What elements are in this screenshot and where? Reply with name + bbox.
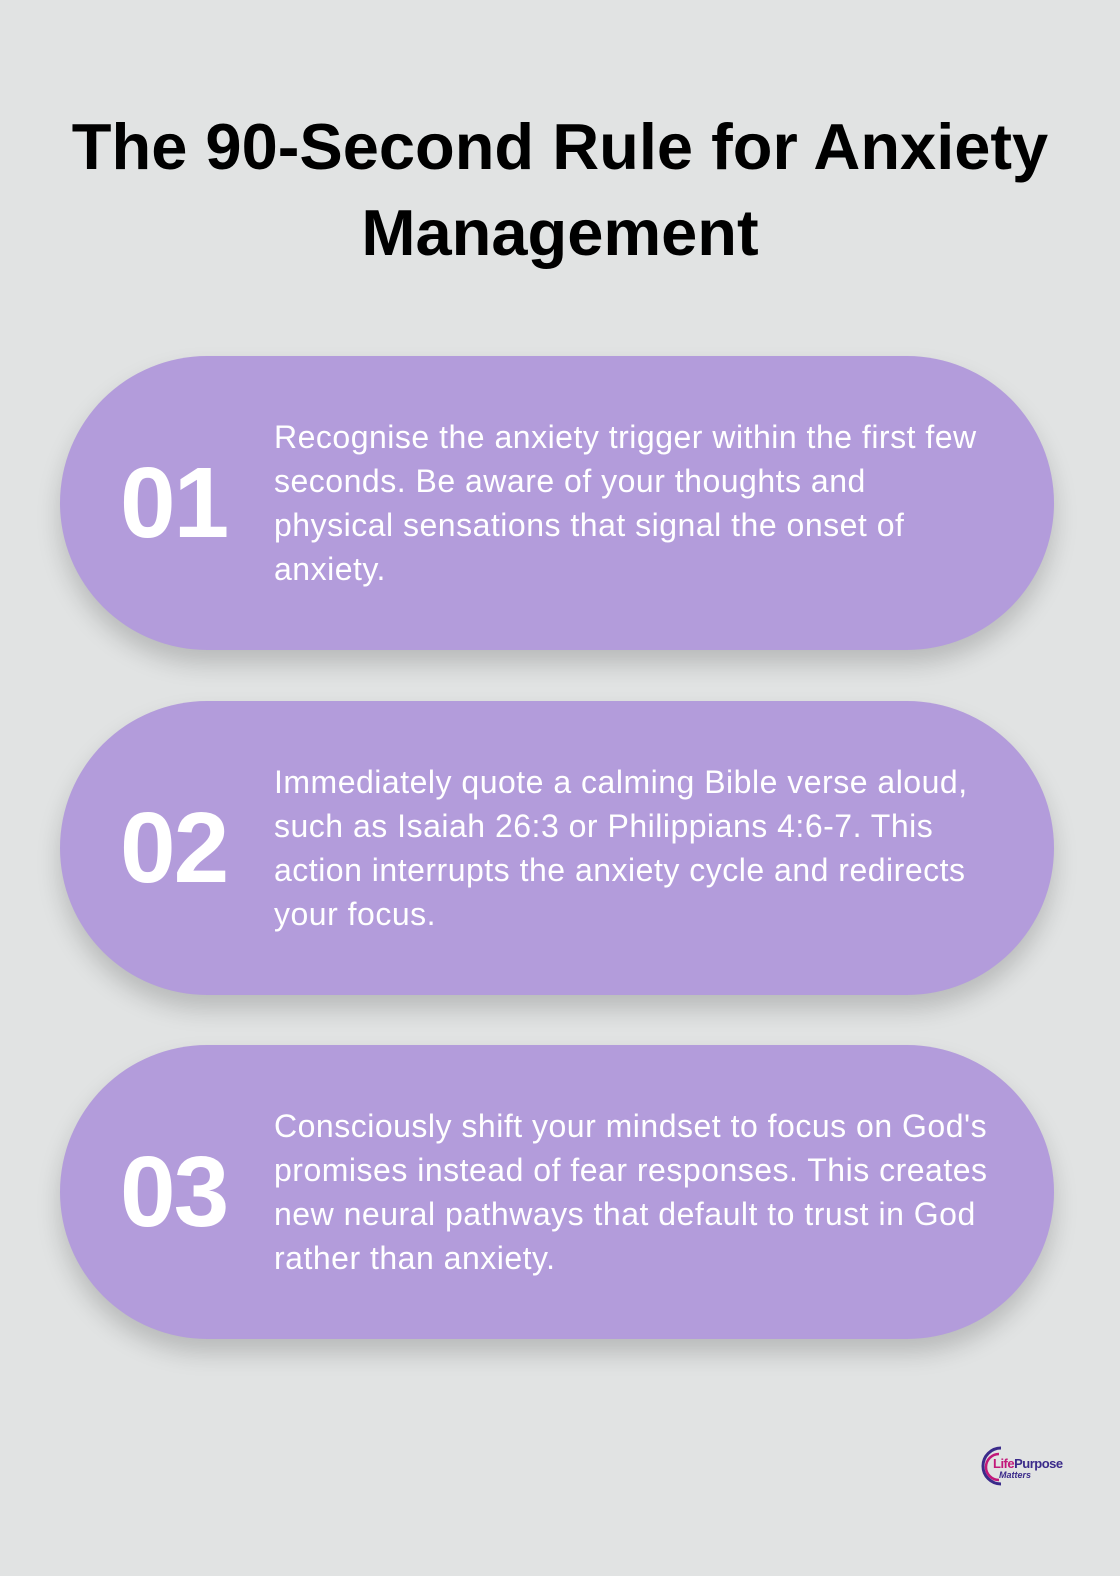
text 01: physical sensations that signal the onset of [274,507,904,543]
text 01: seconds. Be aware of your thoughts and [274,463,866,499]
logo: LifePurpose [993,1456,1063,1471]
text 03: new neural pathways that default to trust in God [274,1196,976,1232]
title: The 90-Second Rule for Anxiety [72,110,1048,183]
text 02: such as Isaiah 26:3 or Philippians 4:6-7. This [274,808,933,844]
text 02: action interrupts the anxiety cycle and redirects [274,852,966,888]
card 01 [60,356,1054,650]
text 01: anxiety. [274,551,386,587]
card 03 [60,1045,1054,1339]
number 01: 01 [120,447,227,559]
number 02: 02 [120,792,227,904]
text 03: Consciously shift your mindset to focus on God's [274,1108,987,1144]
title [72,110,1048,269]
text 01 [274,419,977,587]
logo: Matters [999,1470,1031,1480]
text 03 [274,1108,988,1276]
title: Management [361,196,759,269]
text 03: promises instead of fear responses. This creates [274,1152,988,1188]
text 02: Immediately quote a calming Bible verse aloud, [274,764,968,800]
card 02 [60,701,1054,995]
text 01: Recognise the anxiety trigger within the first few [274,419,977,455]
text 02: your focus. [274,896,436,932]
text 03: rather than anxiety. [274,1240,556,1276]
logo [982,1446,1063,1486]
number 03: 03 [120,1136,227,1248]
text 02 [274,764,968,932]
